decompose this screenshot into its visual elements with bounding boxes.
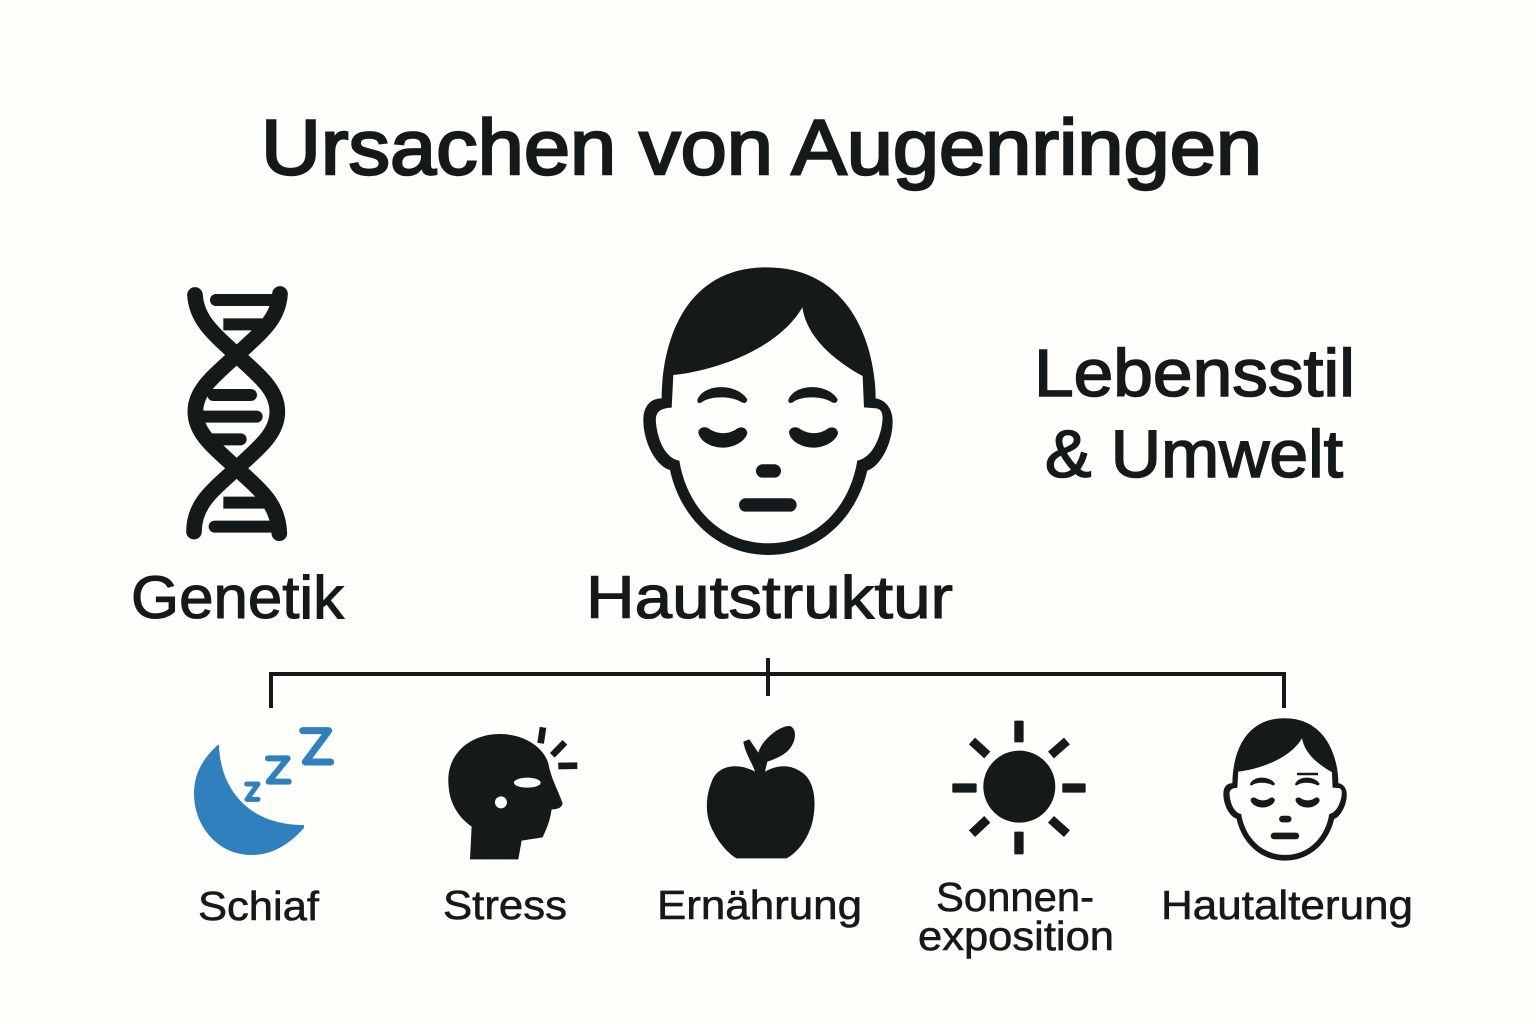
label: Sonnenexposition: exposition	[918, 913, 1114, 959]
title: Ursachen von Augenringen	[261, 103, 1262, 191]
panel: Genetik	[131, 294, 345, 631]
icon: DNA helix	[194, 294, 280, 533]
icon: face with closed eyes	[643, 267, 893, 555]
icon: apple	[707, 726, 815, 858]
heading: Lebensstil und Umwelt	[1034, 336, 1355, 492]
connector bracket	[271, 658, 1284, 708]
label: Genetik: Genetik	[131, 564, 345, 631]
label: Hautalterung: Hautalterung	[1161, 882, 1413, 928]
icon: head with stress rays	[448, 727, 577, 859]
heading: Lebensstil und Umwelt: Lebensstil	[1034, 336, 1355, 411]
label: Sonnenexposition: Sonnen-	[936, 874, 1094, 920]
panel: Schlaf	[194, 731, 331, 929]
icon: small face with wrinkle	[1223, 718, 1347, 861]
label: Stress: Stress	[443, 882, 567, 928]
panel: Sonnenexposition	[918, 721, 1114, 959]
panel: Hautstruktur	[586, 267, 953, 631]
label: Ernährung: Ernährung	[657, 882, 862, 928]
panel: Ernährung	[657, 726, 862, 928]
panel: Hautalterung	[1161, 718, 1413, 928]
heading: Lebensstil und Umwelt: & Umwelt	[1045, 417, 1343, 492]
icon: blue moon with Z letters	[194, 731, 331, 855]
label: Schiaf: Schiaf	[198, 883, 320, 929]
panel: Stress	[443, 727, 577, 928]
icon: sun	[952, 721, 1086, 854]
label: Sonnenexposition	[918, 874, 1114, 959]
label: Hautstruktur: Hautstruktur	[586, 564, 953, 631]
